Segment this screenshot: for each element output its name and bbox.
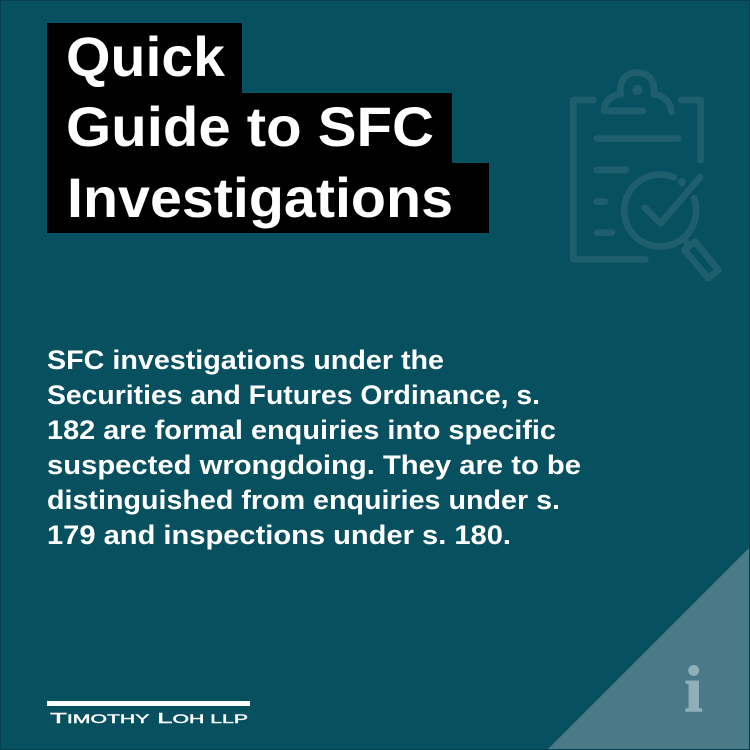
logo: Timothy Loh LLP: [47, 701, 250, 727]
corner triangle: [547, 547, 750, 750]
body text: SFC investigations under the: [47, 345, 444, 375]
body text: 179 and inspections under s. 180.: [47, 520, 511, 550]
title: [47, 23, 489, 233]
body text: 182 are formal enquiries into specific: [47, 415, 556, 445]
title: Quick: [66, 25, 226, 88]
body text: suspected wrongdoing. They are to be: [47, 450, 581, 480]
icon: information letter: i: [684, 653, 703, 726]
logo: Timothy Loh LLP: T IMOTHY L OH LLP: [50, 710, 249, 727]
body text: [47, 345, 581, 550]
body text: distinguished from enquiries under s.: [47, 485, 560, 515]
body text: Securities and Futures Ordinance, s.: [47, 380, 540, 410]
title: Investigations: [67, 166, 453, 229]
title: Guide to SFC: [66, 95, 434, 158]
icon: clipboard with magnifier: [573, 73, 718, 278]
